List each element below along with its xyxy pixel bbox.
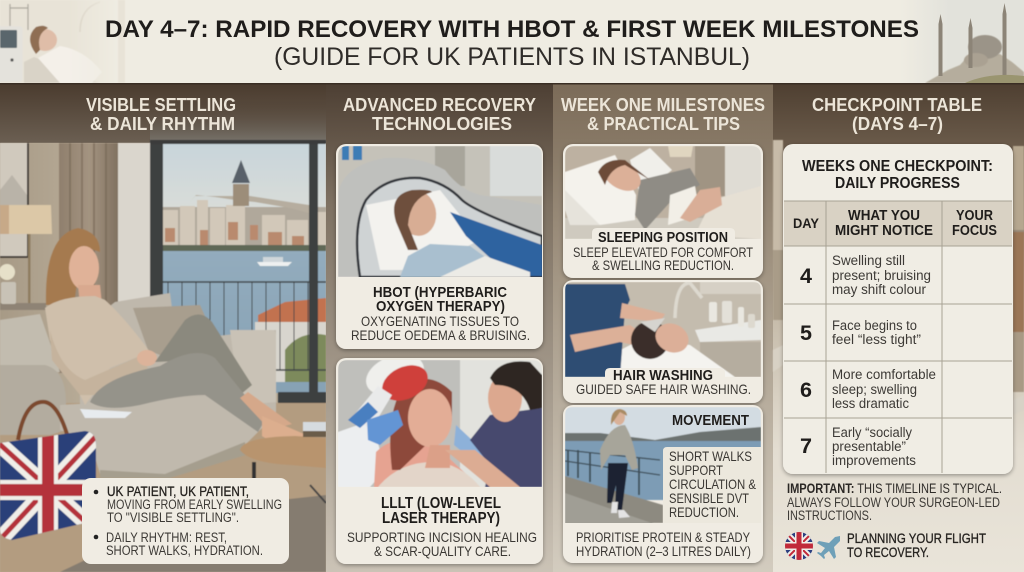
callout: daily rhythm notes: MOVING FROM EARLY SWELLING — [107, 497, 282, 512]
table header row: MIGHT NOTICE — [835, 223, 933, 239]
heading: advanced recovery — [343, 95, 536, 134]
label tab: sleeping position: SLEEPING POSITION — [598, 230, 728, 246]
text: movement guidance: CIRCULATION & — [669, 476, 757, 492]
text: LLLT description: SUPPORTING INCISION HEALING — [347, 529, 537, 545]
row: day 7: 7 — [800, 435, 812, 458]
callout: daily rhythm notes — [82, 478, 289, 564]
row: day 7: presentable” — [832, 439, 906, 454]
panel: checkpoint table — [773, 83, 1024, 572]
row: day 5 — [800, 318, 921, 347]
text: HBOT description: REDUCE OEDEMA & BRUISING. — [351, 327, 530, 343]
text: LLLT description: LLLT (LOW-LEVEL — [381, 495, 501, 512]
text: planning your flight — [847, 531, 986, 560]
title — [105, 16, 919, 71]
callout: daily rhythm notes: SHORT WALKS, HYDRATION. — [106, 543, 263, 558]
text: LLLT description — [347, 495, 537, 559]
row: day 6: less dramatic — [832, 396, 909, 411]
backdrop: Istanbul architecture — [773, 140, 1024, 415]
card: sleeping position — [563, 144, 763, 278]
heading: checkpoint table: (DAYS 4–7) — [852, 114, 943, 134]
heading: advanced recovery: ADVANCED RECOVERY — [343, 95, 536, 115]
illustration: patient resting in apartment overlooking Galata Tower — [0, 140, 326, 572]
text: important note — [787, 481, 1002, 523]
row: day 4: may shift colour — [832, 282, 926, 297]
card: LLLT — [336, 347, 543, 564]
table header row: FOCUS — [952, 223, 997, 239]
table card: daily progress — [783, 144, 1013, 474]
table title: DAILY PROGRESS — [835, 175, 960, 192]
illustration: sleeping elevated — [565, 146, 761, 239]
table header row: WHAT YOU — [848, 208, 920, 224]
panel: advanced recovery technologies — [326, 83, 553, 572]
table title — [802, 158, 993, 192]
text: movement guidance: REDUCTION. — [669, 504, 739, 520]
header band — [0, 0, 1024, 84]
text: movement guidance — [663, 447, 761, 523]
row: day 7 — [800, 425, 916, 468]
text: HBOT description — [351, 284, 530, 343]
title: (GUIDE FOR UK PATIENTS IN ISTANBUL) — [274, 43, 750, 71]
text: LLLT description: LASER THERAPY) — [382, 510, 500, 527]
text: hair washing guidance: GUIDED SAFE HAIR WASHING. — [576, 381, 751, 397]
text: important note: INSTRUCTIONS. — [787, 508, 872, 523]
illustration: low-level laser therapy — [338, 347, 542, 487]
callout: daily rhythm notes: DAILY RHYTHM: REST, — [106, 530, 227, 545]
heading: movement: MOVEMENT — [672, 413, 749, 429]
table header row — [784, 201, 1012, 246]
illustration: patient in hospital bed — [0, 0, 125, 84]
text: movement guidance: SHORT WALKS — [669, 448, 752, 464]
text: HBOT description: HBOT (HYPERBARIC — [373, 284, 507, 301]
row: day 6: sleep; swelling — [832, 382, 917, 397]
icon: UK flag — [785, 532, 813, 560]
table title: WEEKS ONE CHECKPOINT: — [802, 158, 993, 175]
heading: visible settling: & DAILY RHYTHM — [90, 114, 235, 134]
card: movement — [563, 405, 763, 563]
row: day 6 — [800, 367, 936, 411]
text: hydration tip — [576, 529, 751, 559]
row: day 4: present; bruising — [832, 268, 931, 283]
card: hair washing — [563, 280, 763, 403]
table header row: YOUR — [956, 208, 993, 224]
row: day 6: 6 — [800, 379, 812, 402]
text: hydration tip: PRIORITISE PROTEIN & STEADY — [576, 529, 751, 545]
text: movement guidance: SENSIBLE DVT — [669, 490, 749, 506]
text: movement guidance: SUPPORT — [669, 462, 723, 478]
heading: checkpoint table: CHECKPOINT TABLE — [812, 95, 982, 115]
row: day 4 — [800, 253, 931, 297]
callout: daily rhythm notes: TO "VISIBLE SETTLING". — [107, 510, 239, 525]
heading: visible settling: VISIBLE SETTLING — [86, 95, 236, 115]
illustration: guided hair washing — [565, 282, 761, 377]
text: sleep guidance: & SWELLING REDUCTION. — [592, 257, 734, 273]
row: day 5: feel “less tight” — [832, 332, 921, 347]
row: day 7: Early “socially — [832, 425, 912, 440]
title: DAY 4–7: RAPID RECOVERY WITH HBOT & FIRST WEEK MILESTONES — [105, 16, 919, 43]
text: LLLT description: & SCAR-QUALITY CARE. — [374, 543, 511, 559]
callout: daily rhythm notes: UK PATIENT, UK PATIENT, — [107, 484, 249, 499]
text: sleep guidance: SLEEP ELEVATED FOR COMFORT — [573, 244, 753, 260]
icon: aeroplane — [817, 536, 840, 559]
heading: week one milestones: & PRACTICAL TIPS — [587, 114, 740, 134]
text: hydration tip: HYDRATION (2–3 LITRES DAILY) — [576, 543, 751, 559]
row: day 5: Face begins to — [832, 318, 917, 333]
text: planning your flight: TO RECOVERY. — [847, 545, 929, 560]
text: HBOT description: OXYGENATING TISSUES TO — [361, 313, 519, 329]
row: day 4: Swelling still — [832, 253, 905, 268]
heading: visible settling — [86, 95, 236, 134]
text: sleep guidance — [573, 244, 753, 273]
row: day 4: 4 — [800, 265, 812, 288]
row: day 7: improvements — [832, 453, 916, 468]
card: HBOT — [336, 144, 543, 349]
heading: week one milestones — [561, 95, 765, 134]
row: day 5: 5 — [800, 322, 812, 345]
heading: week one milestones: WEEK ONE MILESTONES — [561, 95, 765, 115]
text: planning your flight: PLANNING YOUR FLIGHT — [847, 531, 986, 546]
heading: checkpoint table — [812, 95, 982, 134]
panel: week one milestones — [553, 83, 773, 572]
row: day 6: More comfortable — [832, 367, 936, 382]
text: HBOT description: OXYGEN THERAPY) — [376, 298, 505, 315]
illustration: Istanbul mosque — [900, 0, 1024, 83]
table header row: DAY — [793, 215, 820, 231]
panel: visible settling — [0, 83, 326, 572]
illustration: hyperbaric chamber — [338, 146, 542, 277]
label tab: hair washing: HAIR WASHING — [613, 368, 713, 384]
heading: advanced recovery: TECHNOLOGIES — [372, 114, 512, 134]
illustration: walk on promenade — [565, 407, 761, 527]
